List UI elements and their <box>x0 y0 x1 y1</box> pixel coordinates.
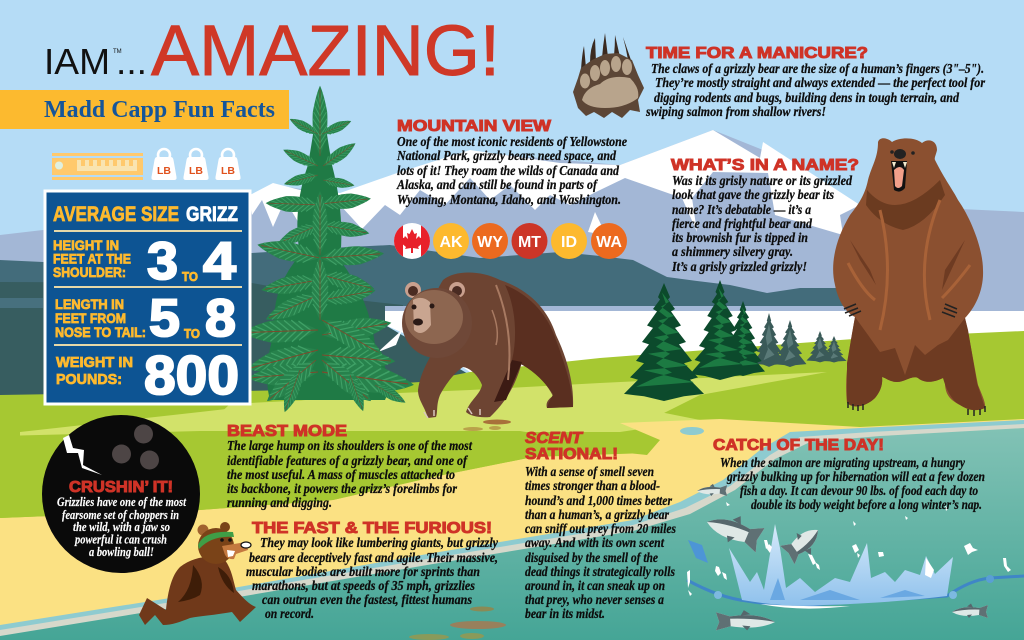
stat: weight: POUNDS: <box>56 371 122 388</box>
heading: CATCH OF THE DAY! <box>713 437 884 454</box>
text block: dead things it strategically rolls <box>525 564 675 579</box>
heading: TIME FOR A MANICURE? <box>646 45 868 62</box>
text block: on record. <box>265 606 314 621</box>
panel: beast mode <box>227 423 473 510</box>
icon: salmon swimming left <box>716 610 775 630</box>
icon: big pine tree <box>241 86 416 414</box>
icon: bowling ball holes <box>112 424 159 470</box>
stat: length: TO <box>184 326 200 341</box>
text block <box>246 535 498 621</box>
text block: The large hump on its shoulders is one of the most <box>227 438 473 453</box>
text block: The claws of a grizzly bear are the size of a human’s fingers (3"–5"). <box>651 61 984 76</box>
heading <box>525 430 618 463</box>
text block: fearsome set of choppers in <box>62 508 179 522</box>
badge: WA <box>591 223 627 259</box>
text block: its backbone, it powers the grizz’s forelimbs for <box>227 481 458 496</box>
text block: disguised by the smell of the <box>525 550 658 565</box>
background: snow field <box>385 311 1024 372</box>
badge: AK <box>433 223 469 259</box>
icon: Canada flag badge <box>394 223 430 259</box>
text block <box>396 134 627 207</box>
text block: identifiable features of a grizzly bear, and one of <box>227 453 468 468</box>
icon: running cartoon bear <box>139 522 256 625</box>
stat: length: 8 <box>205 289 236 348</box>
stat: weight: WEIGHT IN <box>56 354 133 371</box>
text block: its brownish fur is tipped in <box>672 230 808 245</box>
icon: blue jumping fish tail <box>688 540 708 563</box>
text block <box>227 438 473 510</box>
pawprint trail <box>409 420 511 640</box>
text block: a bowling ball! <box>89 545 154 559</box>
text block: One of the most iconic residents of Yellowstone <box>397 134 627 149</box>
stat: height: SHOULDER: <box>53 264 126 280</box>
badge: MT <box>512 223 548 259</box>
icon: row of small fir trees <box>624 280 847 401</box>
text block: When the salmon are migrating upstream, a hungry <box>720 455 965 470</box>
text block <box>671 173 852 274</box>
icon: LB weights <box>151 149 241 180</box>
background: snow wedge <box>378 330 402 352</box>
panel: time for a manicure <box>573 33 986 119</box>
text block: digging rodents and bugs, building dens in tough terrain, and <box>654 90 959 105</box>
text block <box>525 464 676 621</box>
panel: catch of the day <box>713 437 985 512</box>
stat: height: 4 <box>203 232 237 291</box>
text block: running and digging. <box>227 495 332 510</box>
text block: a shimmery silvery gray. <box>672 244 793 259</box>
stat: length: LENGTH IN <box>55 296 124 312</box>
title: TM <box>113 49 122 55</box>
heading: SCENT <box>525 430 583 447</box>
panel: crushin' it <box>42 415 200 573</box>
heading: WHAT’S IN A NAME? <box>671 157 859 174</box>
title: IAM <box>44 41 110 82</box>
stat: height: 3 <box>147 232 178 291</box>
icon: salmon swimming right <box>952 604 988 618</box>
heading: SATIONAL! <box>525 446 618 463</box>
panel: what's in a name <box>671 157 859 274</box>
text block: than a human’s, a grizzly bear <box>525 507 670 522</box>
text block <box>57 495 186 559</box>
icon: ruler <box>52 153 143 180</box>
panel: the fast and the furious <box>246 520 498 621</box>
panel: scent sational <box>525 430 676 621</box>
panel: mountain view <box>394 118 627 259</box>
text block: look that gave the grizzly bear its <box>672 187 834 202</box>
heading: BEAST MODE <box>227 423 347 440</box>
heading: THE FAST & THE FURIOUS! <box>252 520 492 537</box>
text block: away. And with its own scent <box>525 535 665 550</box>
text block: hound’s and 1,000 times better <box>525 493 673 508</box>
background: grassland <box>0 331 1024 530</box>
title: AMAZING! <box>151 12 500 91</box>
stat: height: FEET AT THE <box>53 250 131 266</box>
banner: Madd Capp Fun Facts <box>0 90 289 129</box>
text block: can sniff out prey from 20 miles <box>525 521 676 536</box>
text block: the wild, with a jaw so <box>73 520 170 534</box>
stat: length: FEET FROM <box>55 310 126 326</box>
text block: They may look like lumbering giants, but grizzly <box>260 535 498 550</box>
badge: WY: WY <box>477 234 503 251</box>
badge: WA: WA <box>596 234 622 251</box>
text block: Wyoming, Montana, Idaho, and Washington. <box>397 192 621 207</box>
text block: With a sense of smell seven <box>525 464 654 479</box>
badge: MT: MT <box>518 234 541 251</box>
text block: times stronger than a blood- <box>525 478 660 493</box>
text block: grizzly bulking up for hibernation will eat a few dozen <box>726 469 985 484</box>
text block: lots of it! They roam the wilds of Canada and <box>397 163 619 178</box>
banner: Madd Capp Fun Facts: Madd Capp Fun Facts <box>44 97 275 123</box>
text block <box>645 61 986 119</box>
stat: height: HEIGHT IN <box>53 237 119 253</box>
stat: length: 5 <box>149 289 180 348</box>
text block: National Park, grizzly bears need space, and <box>396 148 616 163</box>
icon: standing roaring grizzly bear <box>833 138 985 416</box>
heading: MOUNTAIN VIEW <box>397 118 552 135</box>
stat: weight: 800 <box>144 344 239 406</box>
stat: length: NOSE TO TAIL: <box>55 324 146 340</box>
badge: ID: ID <box>561 234 577 251</box>
background: back mountains <box>0 130 1024 320</box>
background: sand <box>0 419 1024 640</box>
badge: AK: AK <box>439 234 463 251</box>
badge: ID <box>551 223 587 259</box>
background: teal mountains <box>0 245 860 395</box>
icon: crack <box>63 435 102 475</box>
text block: bears are deceptively fast and agile. Their massive, <box>249 550 498 565</box>
icon: bear paw <box>573 33 644 118</box>
text block: swiping salmon from shallow rivers! <box>645 104 826 119</box>
badge: WY <box>472 223 508 259</box>
background: dark green slope <box>0 431 647 518</box>
text block: can outrun even the fastest, fittest humans <box>262 592 472 607</box>
text block <box>720 455 985 512</box>
heading: CRUSHIN’ IT! <box>69 479 173 496</box>
text block: Grizzlies have one of the most <box>57 495 186 509</box>
text block: around in, it can sneak up on <box>525 578 665 593</box>
title: ... <box>116 41 147 82</box>
stat: weight <box>56 344 239 406</box>
icon: small salmon near shore <box>697 484 727 496</box>
panel: average size grizz <box>45 191 250 406</box>
stat: height <box>53 232 237 291</box>
icon: salmon splash <box>687 502 1024 609</box>
background: water <box>0 420 1024 640</box>
text block: Was it its grisly nature or its grizzled <box>672 173 852 188</box>
text block: Alaska, and can still be found in parts of <box>396 177 598 192</box>
text block: marathons, but at speeds of 35 mph, grizzlies <box>252 578 475 593</box>
text block: name? It’s debatable — it’s a <box>672 202 811 217</box>
text block: muscular bodies are built more for sprints than <box>246 564 480 579</box>
text block: fish a day. It can devour 90 lbs. of food each day to <box>740 483 978 498</box>
text block: the most useful. A mass of muscles attached to <box>227 467 455 482</box>
stat: height: TO <box>182 269 198 284</box>
icon: walking grizzly bear <box>402 272 573 418</box>
text block: It’s a grisly grizzled grizzly! <box>671 259 807 274</box>
text block: double its body weight before a long winter’s nap. <box>751 497 982 512</box>
heading: average size: AVERAGE SIZE <box>53 203 179 226</box>
text block: powerful it can crush <box>74 532 167 546</box>
text block: They’re mostly straight and always extended — the perfect tool for <box>655 75 986 90</box>
text block: fierce and frightful bear and <box>672 216 812 231</box>
stat: length <box>55 289 236 348</box>
heading: average size: GRIZZ <box>186 203 238 226</box>
text block: bear in its midst. <box>525 606 605 621</box>
icon: leaping salmon large <box>703 506 766 552</box>
icon: leaping salmon small <box>780 521 827 566</box>
text block: that prey, who never senses a <box>525 592 664 607</box>
